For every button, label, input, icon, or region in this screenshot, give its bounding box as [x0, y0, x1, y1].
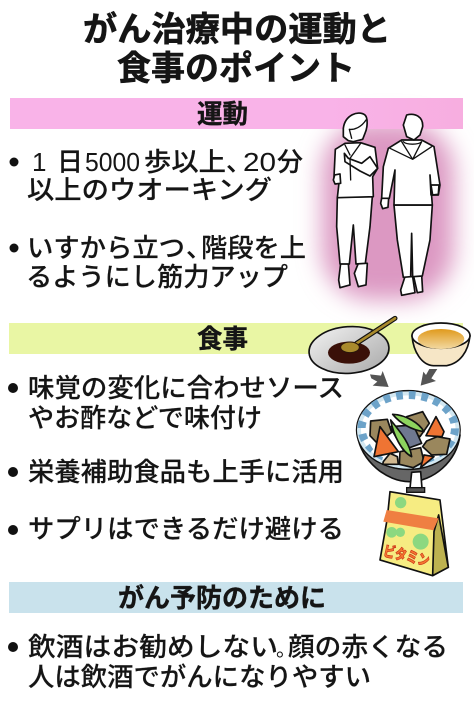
heading band: exercise: 運動 [197, 99, 248, 129]
panel: diet [8, 318, 470, 576]
text: diet point 2: 栄養補助食品も上手に活用 [28, 457, 344, 487]
icon: vitamin supplement pack [380, 472, 448, 576]
pink glow behind walkers [322, 122, 454, 300]
man [381, 114, 440, 295]
text: exercise point 2: 階段を上 [201, 233, 306, 263]
text: exercise point 1: 歩以上 [144, 147, 226, 177]
heading band: prevention: がん予防のために [118, 583, 326, 613]
arrow: vinegar to bowl [421, 369, 437, 386]
icon: vitamin supplement pack: ビタミン [382, 542, 431, 570]
icons: food illustration [307, 318, 470, 576]
icon: walking couple [333, 113, 440, 295]
panel: cancer prevention [8, 582, 463, 692]
text: exercise point 1: 1 [32, 147, 46, 177]
arrow: dish to bowl [370, 371, 389, 387]
text: exercise point 1: 日 [57, 147, 83, 177]
heading band: diet: 食事 [197, 324, 248, 354]
text: diet point 1 [8, 373, 344, 433]
text: exercise point 1: 、 [226, 147, 252, 177]
heading band: diet [9, 323, 463, 354]
text: prevention point: 。 [276, 639, 296, 661]
text: exercise point 2: るようにし筋力アップ [26, 262, 288, 292]
text: prevention point: 人は飲酒でがんになりやすい [28, 662, 371, 692]
text: exercise point 2: いすから立つ [27, 233, 185, 263]
panel: exercise [10, 98, 463, 300]
icon: sauce dish with spoon [307, 318, 395, 376]
text: exercise point 1: 5000 [85, 147, 140, 177]
text: diet point 1: やお酢などで味付け [28, 403, 262, 433]
text: exercise point 1: 20 [243, 147, 276, 177]
text: diet point 3: サプリはできるだけ避ける [28, 514, 344, 544]
text: prevention point: 飲酒はお勧めしない [28, 632, 278, 662]
heading band: prevention [9, 582, 463, 613]
text: exercise point 1 [10, 147, 303, 205]
text: prevention point: 顔の赤くなる [288, 632, 448, 662]
heading band: exercise [10, 98, 463, 129]
text: exercise point 2 [10, 233, 306, 292]
icon: vinegar bowl [412, 323, 470, 366]
text: prevention point [8, 632, 448, 692]
text: exercise point 1: 分 [277, 147, 303, 177]
title: 食事のポイント [117, 50, 355, 88]
title [83, 10, 391, 88]
text: diet point 1: 味覚の変化に合わせソース [28, 373, 344, 403]
text: exercise point 1: 以上のウオーキング [27, 175, 272, 205]
icon: stew bowl [357, 391, 460, 482]
text: exercise point 2: 、 [186, 233, 212, 263]
woman [333, 113, 378, 288]
title: がん治療中の運動と [83, 10, 391, 49]
